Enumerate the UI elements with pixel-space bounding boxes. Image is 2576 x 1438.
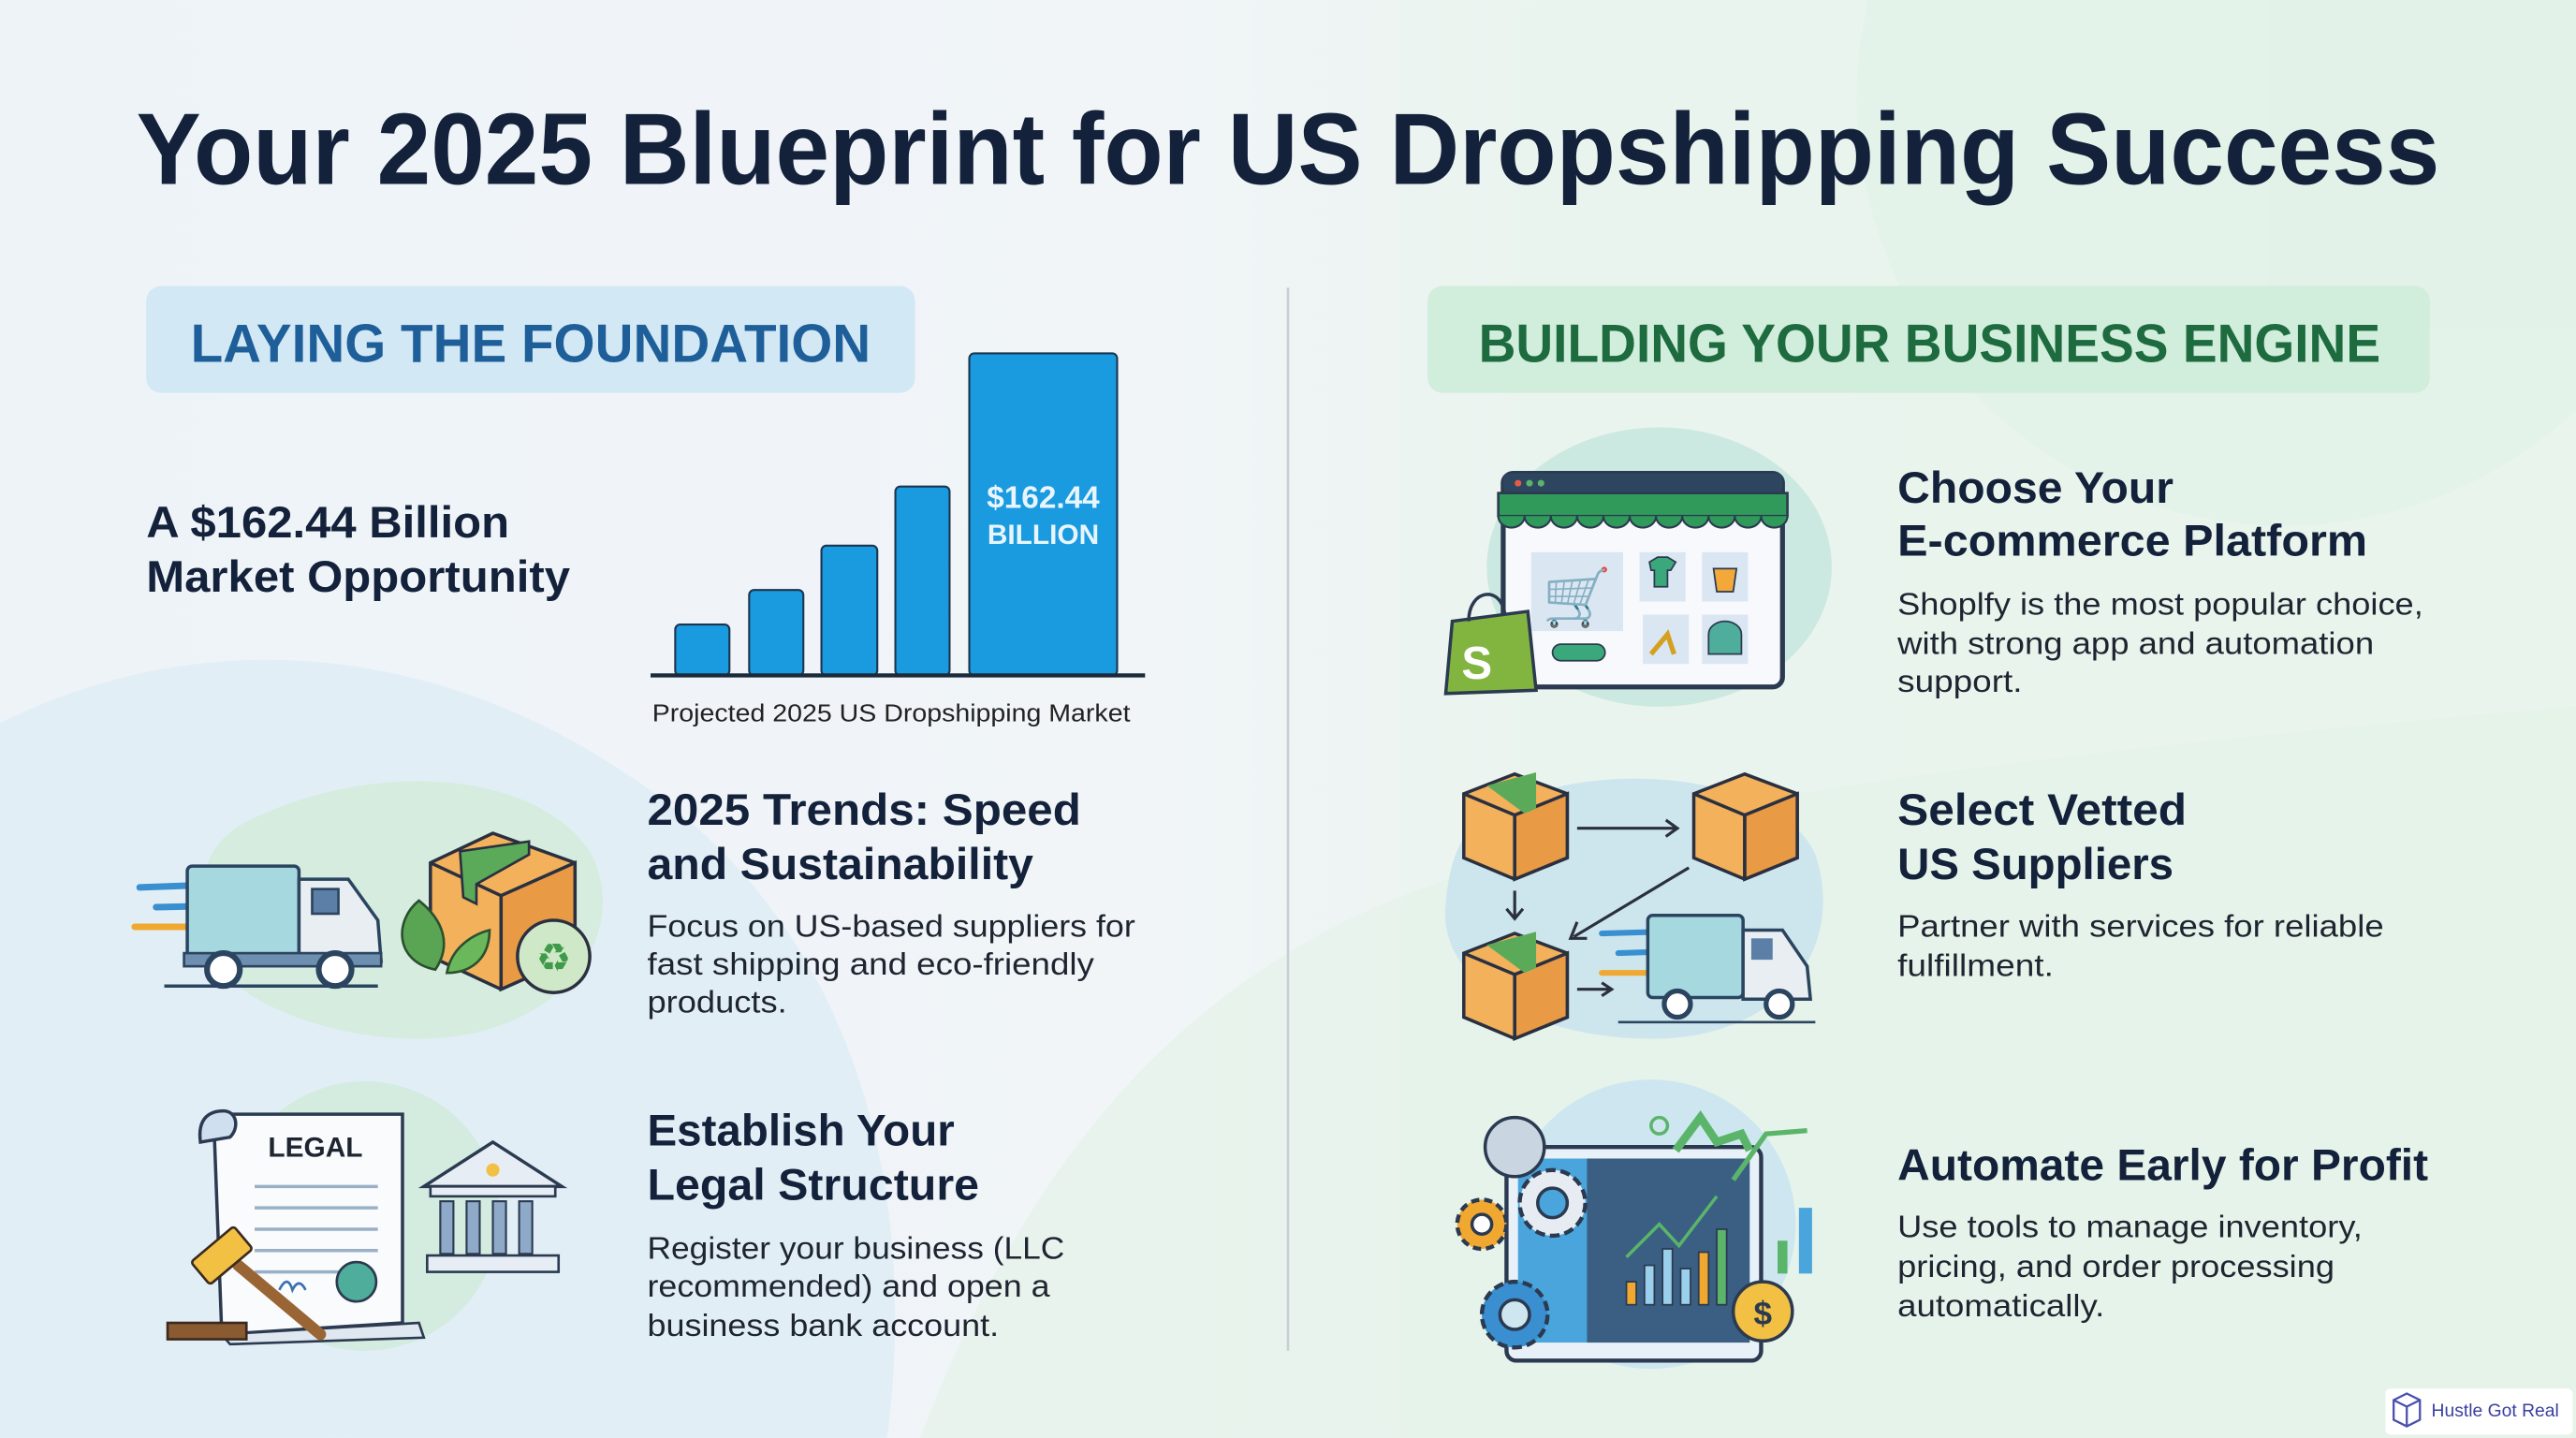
market opportunity heading [146,498,571,602]
title: Your 2025 Blueprint for US Dropshipping Success [137,93,2439,207]
icon: fast truck and eco box: ♻ [536,935,571,979]
market opportunity heading: Market Opportunity [146,552,571,602]
text: legal structure: Establish Your [648,1106,955,1155]
divider [1287,287,1289,1351]
text: ecommerce platform: Shoplfy is the most popular choice, [1897,588,2423,623]
market opportunity heading: A $162.44 Billion [146,498,509,548]
heading pill: building your business engine: BUILDING YOUR BUSINESS ENGINE [1479,314,2380,374]
icon: online storefront [1445,427,1832,707]
watermark badge: Hustle Got Real [2432,1401,2559,1421]
bar chart: market growth [651,353,1145,727]
bar chart: market growth: $162.44 [987,480,1100,515]
text: vetted suppliers: Select Vetted [1897,785,2187,835]
text: automate: pricing, and order processing [1897,1250,2334,1284]
text: vetted suppliers: Partner with services for reliable [1897,910,2384,945]
text: vetted suppliers: US Suppliers [1897,840,2174,889]
text: automate [1897,1140,2428,1324]
icon: supplier network [1445,772,1823,1039]
text: 2025 trends: and Sustainability [648,840,1034,889]
text: 2025 trends: fast shipping and eco-friendly [648,947,1094,982]
text: 2025 trends: products. [648,985,787,1020]
text: ecommerce platform: with strong app and automation [1896,627,2374,662]
icon: automation dashboard [1457,1079,1812,1369]
icon: online storefront: S [1461,638,1492,689]
text: legal structure: Legal Structure [648,1160,979,1210]
watermark badge [2385,1388,2572,1434]
text: automate: Use tools to manage inventory, [1897,1211,2363,1245]
text: 2025 trends: Focus on US-based suppliers for [648,910,1135,945]
text: 2025 trends: 2025 Trends: Speed [648,785,1081,835]
text: automate: Automate Early for Profit [1897,1140,2428,1190]
text: ecommerce platform: E-commerce Platform [1897,516,2367,565]
icon: online storefront: 🛒 [1543,565,1612,629]
text: 2025 trends [648,785,1135,1020]
icon: automation dashboard: $ [1753,1296,1772,1332]
icon: fast truck and eco box [135,781,603,1039]
icon: legal document and bank: LEGAL [268,1133,363,1164]
text: ecommerce platform: Choose Your [1897,463,2174,513]
text: vetted suppliers: fulfillment. [1897,949,2054,984]
bar chart: market growth: BILLION [988,520,1099,550]
text: legal structure: Register your business (LLC [648,1232,1064,1267]
heading pill: building your business engine [1427,286,2430,393]
icon: legal document and bank [168,1081,562,1351]
text: vetted suppliers [1897,785,2384,984]
text: legal structure: business bank account. [648,1309,999,1343]
text: ecommerce platform: support. [1897,665,2023,699]
text: ecommerce platform [1896,463,2423,699]
bar chart: market growth: Projected 2025 US Dropshipping Market [652,699,1131,727]
heading pill: laying the foundation: LAYING THE FOUNDATION [191,314,871,374]
heading pill: laying the foundation [146,286,915,393]
text: legal structure [648,1106,1064,1343]
text: automate: automatically. [1897,1289,2104,1324]
text: legal structure: recommended) and open a [648,1269,1050,1304]
